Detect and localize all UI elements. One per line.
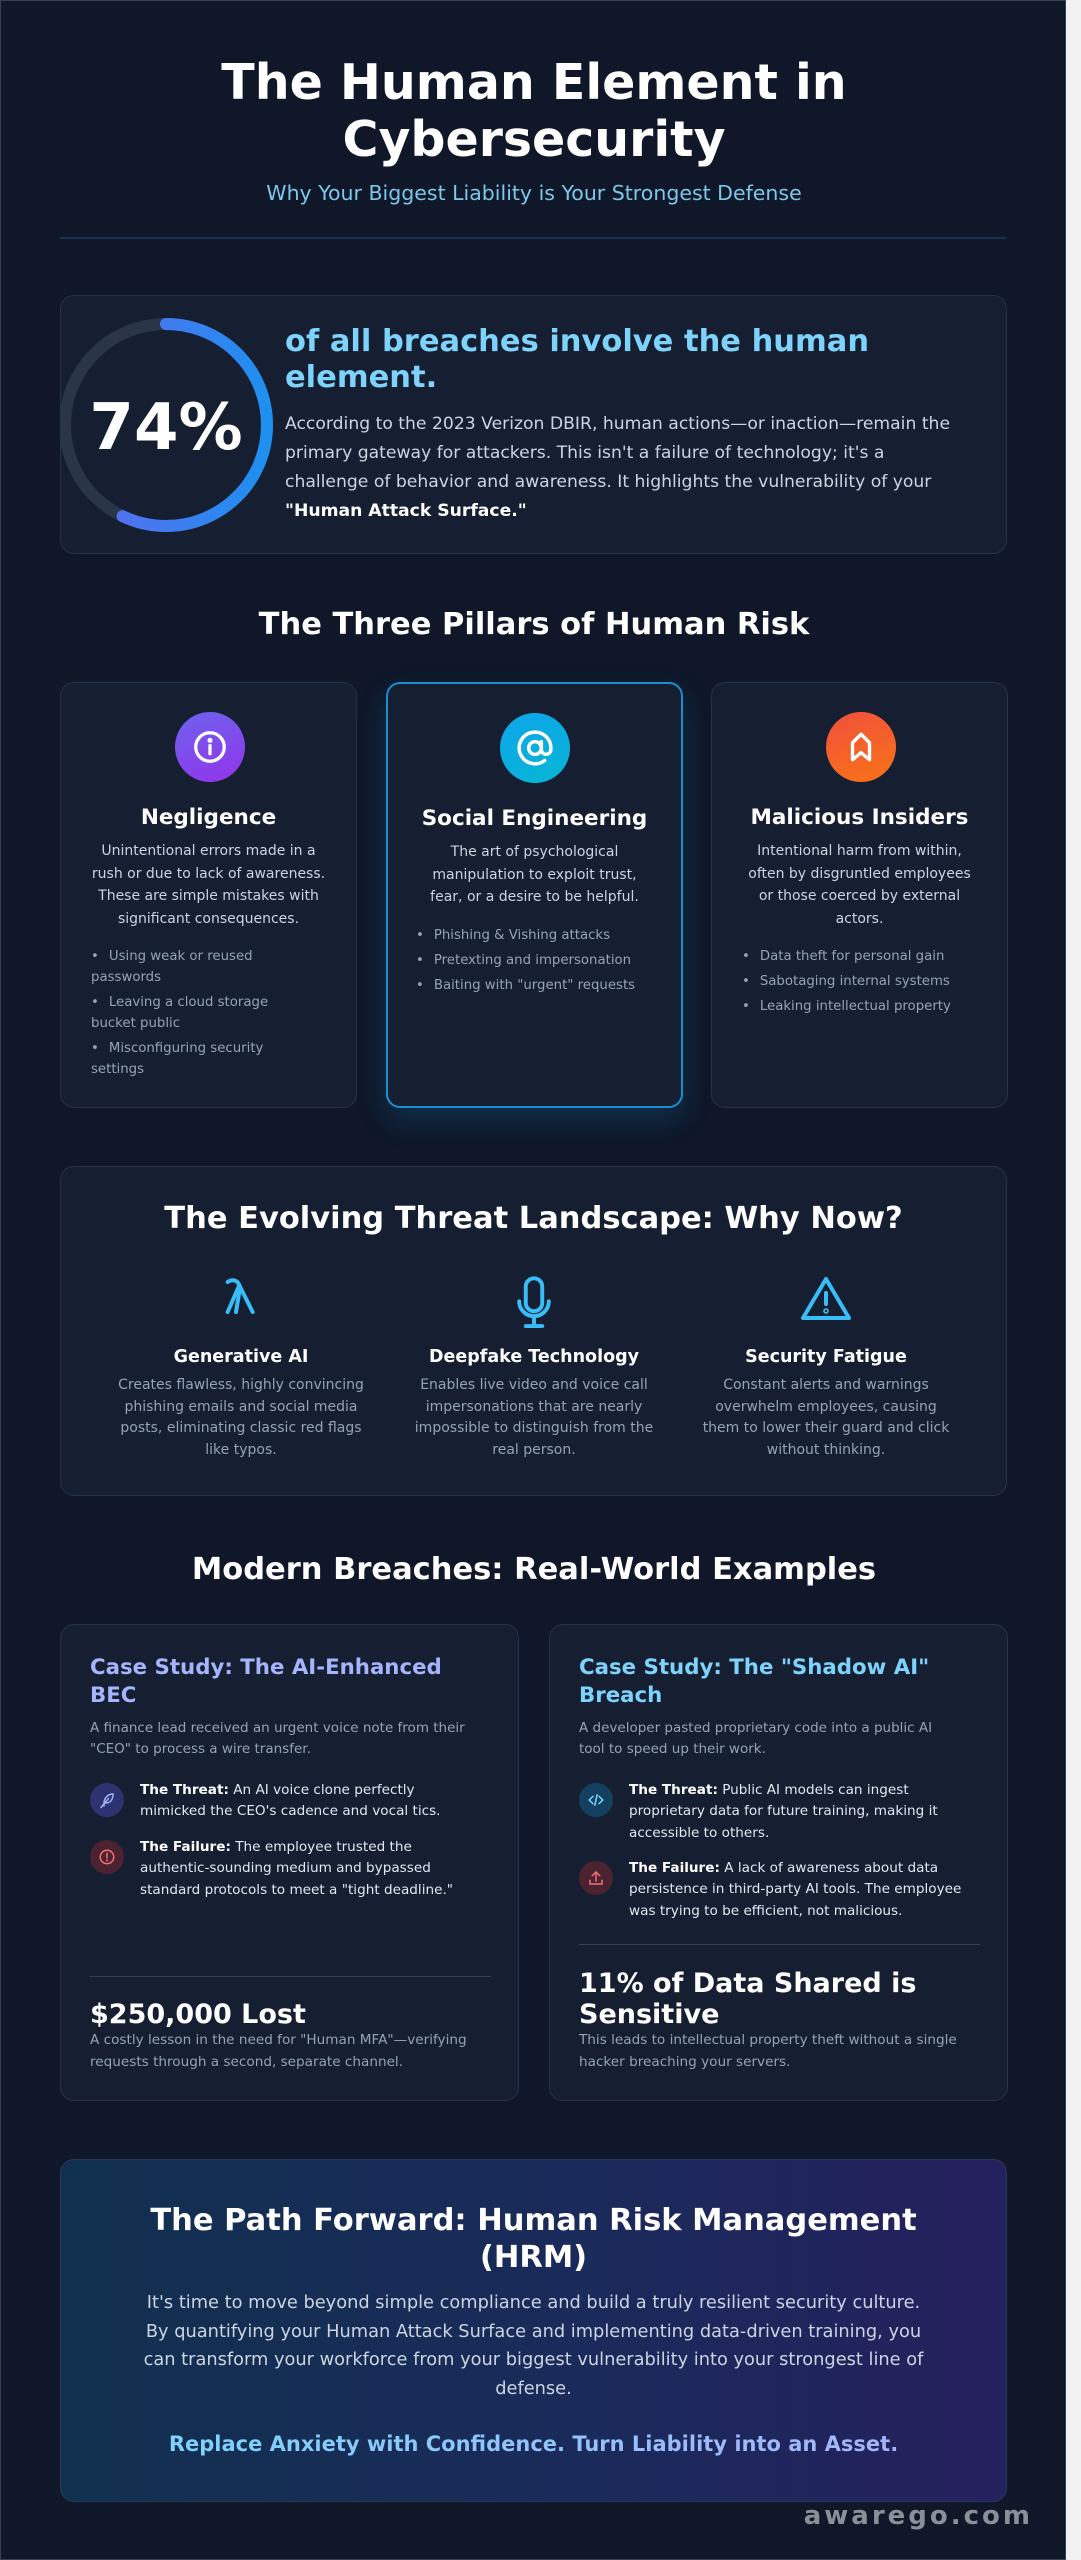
heading: modern breaches: Modern Breaches: Real-World Examples: [192, 1552, 876, 1587]
column: generative AI: [118, 1278, 364, 1458]
panel: case study BEC: mimicked the CEO's cadence and vocal tics.: [140, 1803, 440, 1819]
logo: awarego.com: awarego.com: [804, 2501, 1033, 2531]
text block: HRM: [144, 2292, 924, 2398]
panel: malicious insiders: or those coerced by external: [759, 888, 960, 904]
panel: social engineering: [386, 682, 683, 1108]
column: security fatigue: [703, 1276, 950, 1458]
panel: case study shadow AI: [549, 1624, 1008, 2101]
panel: social engineering: Pretexting and impersonation: [434, 953, 631, 968]
title: [221, 54, 847, 168]
panel: case study shadow AI: The Threat: Public AI models can ingest: [629, 1782, 909, 1798]
panel: case study BEC: BEC: [90, 1683, 136, 1708]
heading: path forward: (HRM): [480, 2240, 587, 2275]
heading: of all breaches: element.: [285, 360, 437, 395]
panel: negligence: Negligence: [141, 805, 276, 830]
panel: case study shadow AI: proprietary data for future training, making it: [629, 1803, 938, 1819]
panel: case study BEC: "CEO" to process a wire transfer.: [90, 1741, 311, 1757]
column: generative AI: Generative AI: [174, 1347, 308, 1367]
text block: DBIR: "Human Attack Surface.": [285, 501, 527, 521]
panel: malicious insiders: Intentional harm from within,: [757, 843, 962, 859]
panel: malicious insiders: Malicious Insiders: [751, 805, 968, 830]
icon: upload: [579, 1861, 613, 1895]
heading: of all breaches: [285, 324, 869, 395]
text block: DBIR: challenge of behavior and awareness. It highlights the vulnerability of your: [285, 472, 931, 492]
panel: negligence: Misconfiguring security settings: [91, 1041, 263, 1077]
text block: HRM: defense.: [495, 2378, 572, 2398]
stat: 11%: 11% of Data Shared is: [579, 1968, 916, 1999]
subtitle: Why Your Biggest Liability is Your Strongest Defense: [266, 181, 802, 205]
heading: three pillars: The Three Pillars of Human Risk: [259, 607, 809, 642]
panel: social engineering: manipulation to exploit trust,: [432, 867, 637, 883]
panel: case study shadow AI: Case Study: The "Shadow AI": [579, 1655, 929, 1680]
stat: $250,000: $250,000 Lost: [90, 1999, 306, 2030]
chart: ring 74%: 74%: [89, 391, 243, 465]
icon: generative ai: [226, 1278, 255, 1314]
text block: HRM: By quantifying your Human Attack Surface and implementing data-driven training, you: [146, 2320, 921, 2342]
panel: case study shadow AI: A developer pasted proprietary code into a public AI: [579, 1720, 932, 1736]
text block: DBIR: primary gateway for attackers. This isn't a failure of technology; it's a: [285, 443, 884, 463]
panel: case study BEC: [60, 1624, 519, 2101]
panel: social engineering: Phishing & Vishing attacks: [434, 928, 610, 943]
icon: feather: [90, 1783, 124, 1817]
column: security fatigue: Security Fatigue: [745, 1347, 907, 1367]
tagline: Replace Anxiety with Confidence. Turn Liability into an Asset.: [169, 2432, 898, 2456]
panel: case study shadow AI: The Failure: A lack of awareness about data: [629, 1860, 938, 1876]
panel: case study shadow AI: This leads to intellectual property theft without a single: [579, 2032, 957, 2048]
panel: case study BEC: The Threat: An AI voice clone perfectly: [140, 1782, 415, 1798]
panel: negligence: Using weak or reused passwords: [91, 949, 253, 985]
panel: case study BEC: authentic-sounding medium and bypassed: [140, 1860, 431, 1876]
panel: case study shadow AI: was trying to be efficient, not malicious.: [629, 1903, 902, 1919]
panel: malicious insiders: actors.: [836, 911, 883, 927]
panel: negligence: Leaving a cloud storage bucket public: [91, 995, 268, 1031]
text block: DBIR: [285, 414, 950, 521]
heading: path forward: The Path Forward: Human Risk Management: [150, 2203, 917, 2238]
panel: case study BEC: A costly lesson in the need for "Human MFA"—verifying: [90, 2032, 467, 2048]
column: security fatigue: Constant alerts and warnings overwhelm employees, causing them to lower their guard and click without thinking.: [703, 1377, 949, 1458]
threat row: [579, 1782, 938, 1841]
panel: malicious insiders: often by disgruntled employees: [748, 866, 971, 882]
panel: case study shadow AI: Breach: [579, 1683, 662, 1708]
title: The Human Element in: [221, 54, 847, 111]
panel: social engineering: fear, or a desire to be helpful.: [430, 889, 639, 905]
panel: malicious insiders: [711, 682, 1008, 1108]
panel: threat landscape: [60, 1166, 1007, 1496]
panel: case study BEC: requests through a second, separate channel.: [90, 2054, 403, 2070]
panel: case study shadow AI: tool to speed up their work.: [579, 1741, 766, 1757]
panel: case study BEC: standard protocols to meet a "tight deadline.": [140, 1882, 453, 1898]
chart: ring 74%: [61, 318, 273, 532]
panel: malicious insiders: Leaking intellectual property: [760, 999, 951, 1014]
panel: negligence: These are simple mistakes with: [98, 888, 319, 904]
icon: insider: [826, 712, 896, 782]
failure row: [579, 1860, 961, 1919]
icon: alert: [90, 1840, 124, 1874]
panel: social engineering: The art of psychological: [451, 844, 618, 860]
failure row: [90, 1839, 453, 1898]
heading: evolving threat: The Evolving Threat Landscape: Why Now?: [164, 1201, 903, 1236]
panel: malicious insiders: Data theft for personal gain: [760, 949, 944, 964]
panel: 74% stat card: [60, 295, 1007, 554]
panel: case study shadow AI: accessible to others.: [629, 1825, 769, 1841]
icon: info: [175, 712, 245, 782]
panel: case study shadow AI: persistence in third-party AI tools. The employee: [629, 1881, 961, 1897]
icon: microphone: [517, 1276, 551, 1328]
heading: of all breaches: of all breaches involve the human: [285, 324, 869, 359]
stat: 11%: [579, 1968, 916, 2030]
panel: case study BEC: A finance lead received an urgent voice note from their: [90, 1720, 465, 1736]
icon: at: [500, 713, 570, 783]
panel: negligence: significant consequences.: [118, 911, 299, 927]
panel: case study BEC: Case Study: The AI-Enhanced: [90, 1655, 442, 1680]
panel: negligence: Unintentional errors made in a: [101, 843, 316, 859]
text block: DBIR: According to the 2023 Verizon DBIR, human actions—or inaction—remain the: [285, 414, 950, 434]
heading: path forward: [150, 2203, 917, 2275]
icon: warning: [800, 1276, 851, 1320]
column: deepfake: Enables live video and voice call impersonations that are nearly impossible to distinguish from the real person.: [415, 1377, 653, 1458]
panel: case study BEC: The Failure: The employee trusted the: [140, 1839, 412, 1855]
panel: case study shadow AI: hacker breaching your servers.: [579, 2054, 790, 2070]
title: Cybersecurity: [342, 111, 726, 168]
panel: malicious insiders: Sabotaging internal systems: [760, 974, 950, 989]
threat row: [90, 1782, 440, 1819]
text block: HRM: can transform your workforce from your biggest vulnerability into your strongest line of: [144, 2349, 923, 2370]
stat: 11%: Sensitive: [579, 1999, 719, 2030]
text block: HRM: It's time to move beyond simple compliance and build a truly resilient security culture.: [147, 2292, 920, 2313]
icon: code: [579, 1783, 613, 1817]
column: generative AI: Creates flawless, highly convincing phishing emails and social media posts, eliminating classic red flags like typos.: [118, 1377, 364, 1458]
panel: path forward: [60, 2159, 1007, 2502]
column: deepfake: Deepfake Technology: [429, 1347, 639, 1367]
panel: negligence: [60, 682, 357, 1108]
panel: social engineering: Baiting with "urgent" requests: [434, 978, 635, 993]
column: deepfake: [415, 1276, 653, 1458]
panel: social engineering: Social Engineering: [422, 806, 647, 831]
panel: negligence: rush or due to lack of awareness.: [92, 866, 325, 882]
